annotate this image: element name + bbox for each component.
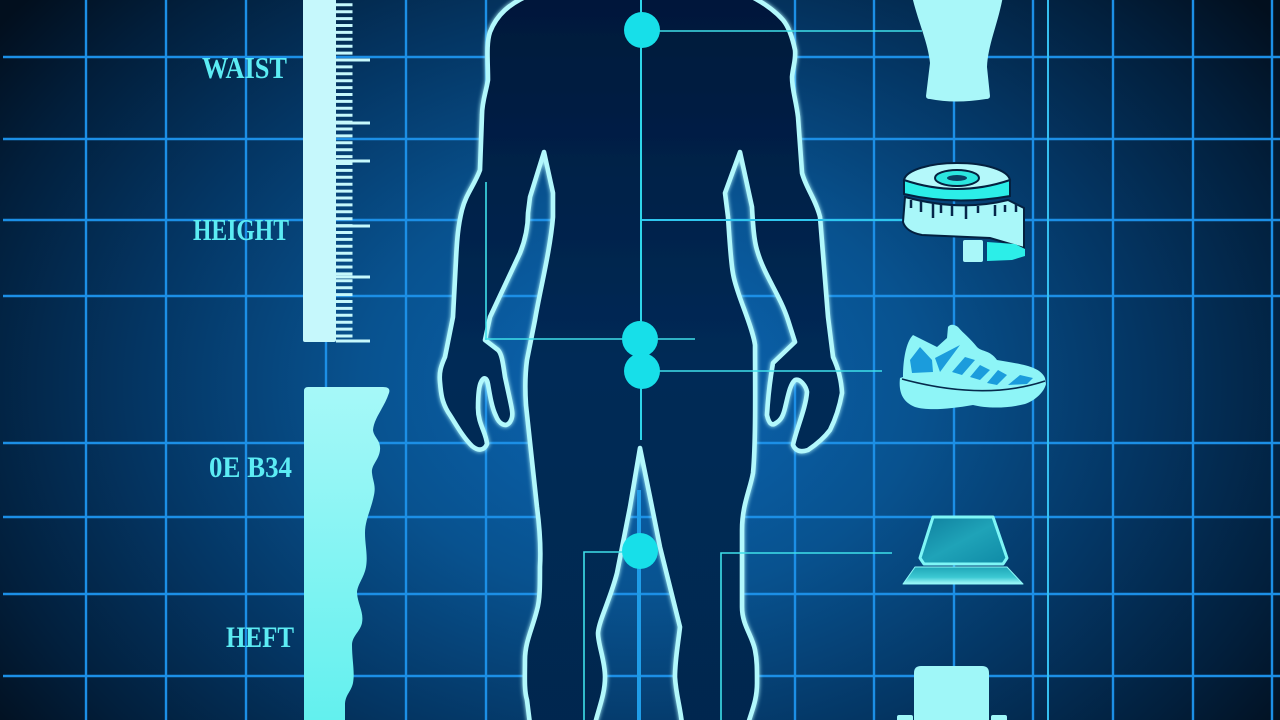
label: code: 0E B34 xyxy=(209,451,292,484)
body silhouette xyxy=(440,0,842,720)
icon: running shoe xyxy=(900,325,1046,409)
connector lines xyxy=(485,31,922,720)
label: heft: HEFT xyxy=(226,621,294,654)
centre measuring line xyxy=(639,0,641,720)
icon: torso garment xyxy=(912,0,1003,102)
icon: chair xyxy=(897,666,1007,720)
label: height: HEIGHT xyxy=(193,212,289,247)
ruler xyxy=(303,0,370,342)
icon: measuring tape xyxy=(903,163,1025,262)
ragged measuring strip xyxy=(304,387,389,720)
icon: laptop xyxy=(903,517,1023,584)
measurement points xyxy=(622,12,660,569)
label: waist: WAIST xyxy=(202,50,287,85)
